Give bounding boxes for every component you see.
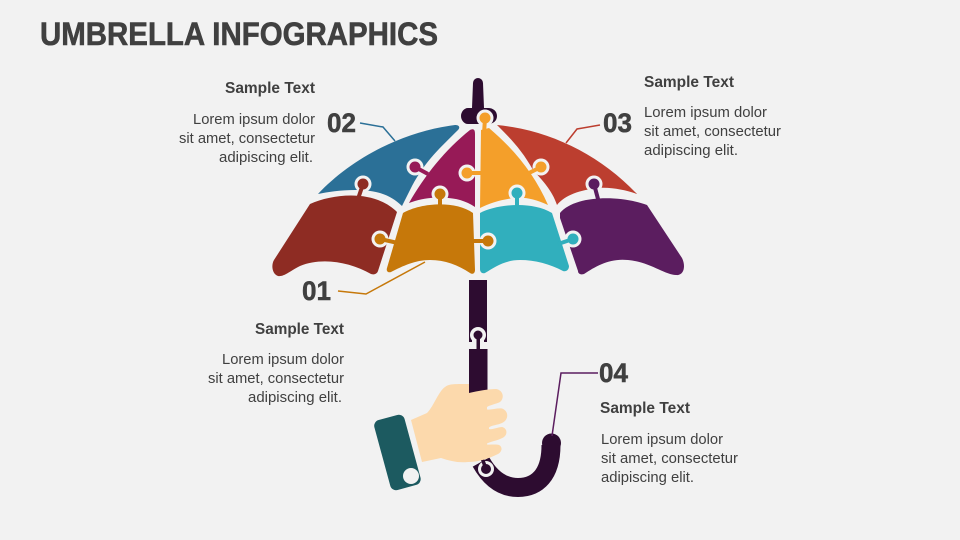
umbrella canopy: [272, 78, 684, 276]
panel: magenta centre-left: [406, 129, 475, 207]
shaft joint: [470, 327, 486, 350]
hand: [411, 384, 507, 462]
leader line 01: [338, 262, 425, 294]
number 03: 03: [603, 108, 632, 138]
body 01: [208, 351, 344, 406]
panel: teal lower-centre: [480, 184, 582, 273]
panel: red top-right: [497, 125, 637, 205]
body 02: Lorem ipsum dolor: [193, 111, 315, 128]
body 04: adipiscing elit.: [601, 469, 694, 486]
sleeve button: [403, 468, 419, 484]
body 03: adipiscing elit.: [644, 142, 738, 159]
callout 01: [208, 262, 425, 406]
leader line 04: [552, 373, 598, 436]
callout 03: [566, 74, 781, 159]
body 02: sit amet, consectetur: [179, 130, 315, 147]
body 01: adipiscing elit.: [248, 389, 342, 406]
body 03: Lorem ipsum dolor: [644, 104, 767, 121]
curved hook: [478, 434, 561, 488]
body 01: Lorem ipsum dolor: [222, 351, 344, 368]
hand holding handle: [373, 384, 507, 492]
umbrella handle: [469, 280, 561, 488]
title: UMBRELLA INFOGRAPHICS: [40, 16, 438, 52]
number 02: 02: [327, 108, 356, 138]
number 04: 04: [599, 358, 628, 388]
body 02: [179, 111, 315, 166]
body 03: sit amet, consectetur: [644, 123, 781, 140]
panel: purple lower-right: [560, 176, 684, 275]
finial: [461, 78, 497, 124]
panel: brown lower-left: [272, 176, 397, 276]
shaft upper segment: [469, 280, 487, 342]
number 01: 01: [302, 276, 331, 306]
panel: orange centre-right: [458, 110, 550, 208]
leader line 03: [566, 125, 600, 143]
heading 02: Sample Text: [225, 80, 315, 97]
body 02: adipiscing elit.: [219, 149, 313, 166]
body 04: [601, 431, 738, 486]
callout 02: [179, 80, 395, 166]
panel: blue top-left: [318, 125, 459, 206]
heading 01: Sample Text: [255, 321, 344, 338]
body 04: sit amet, consectetur: [601, 450, 738, 467]
callout 04: [552, 358, 738, 486]
heading 03: Sample Text: [644, 74, 734, 91]
heading 04: Sample Text: [600, 400, 690, 417]
shaft lower segment: [469, 349, 488, 399]
sleeve: [373, 413, 422, 492]
panel: gold lower-centre: [372, 186, 496, 274]
body 03: [644, 104, 781, 159]
body 01: sit amet, consectetur: [208, 370, 344, 387]
leader line 02: [360, 123, 395, 141]
body 04: Lorem ipsum dolor: [601, 431, 723, 448]
